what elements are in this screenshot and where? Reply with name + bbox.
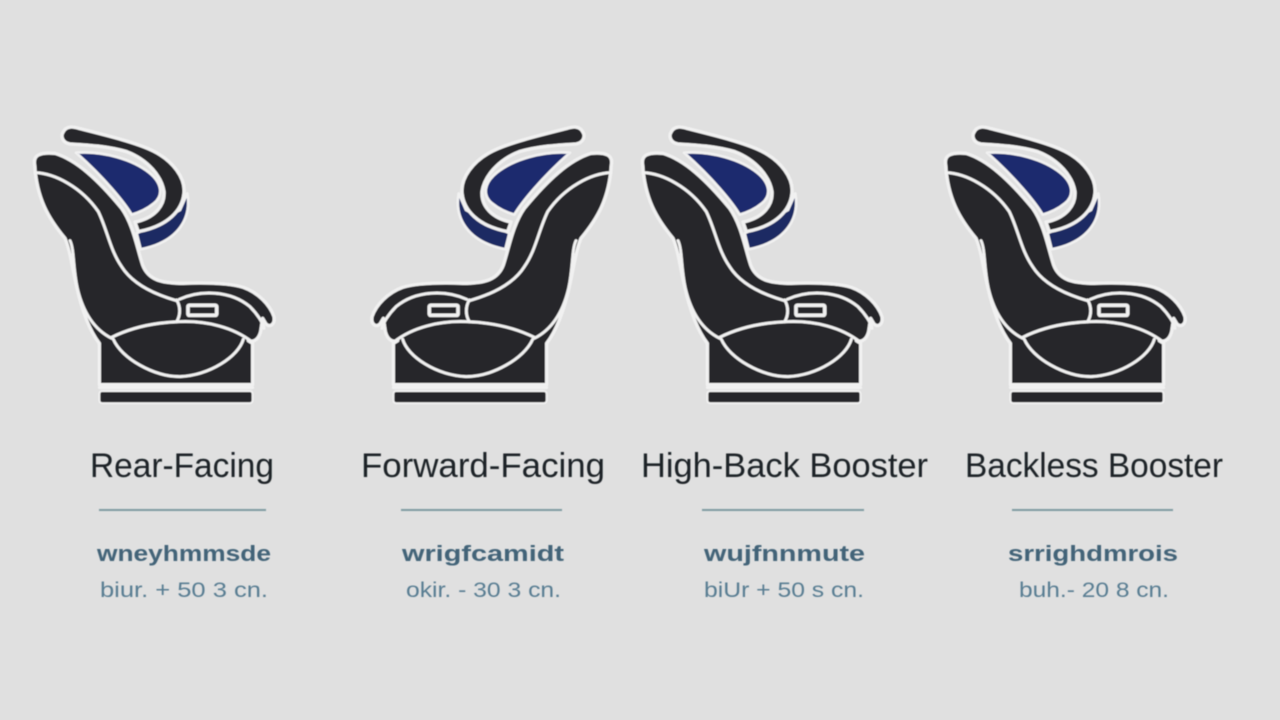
panel: high-back booster xyxy=(641,127,928,602)
range text: rear-facing: biur. + 50 3 cn. xyxy=(100,579,268,602)
weight label: forward-facing: wrigfcamidt xyxy=(401,541,565,566)
weight label: high-back booster: wujfnnmute xyxy=(703,541,865,566)
infographic content xyxy=(34,127,1223,602)
panel: backless booster xyxy=(945,127,1223,602)
divider: high-back booster xyxy=(702,509,864,511)
weight label: rear-facing: wneyhmmsde xyxy=(96,541,271,566)
icon: rear-facing car seat xyxy=(34,127,274,403)
divider: backless booster xyxy=(1012,509,1173,511)
panel: forward-facing xyxy=(361,127,612,602)
icon: backless booster seat xyxy=(945,127,1185,403)
icon: forward-facing car seat xyxy=(372,127,612,403)
range text: high-back booster: biUr + 50 s cn. xyxy=(704,579,864,602)
weight label: backless booster: srrighdmrois xyxy=(1008,541,1178,566)
heading: rear-facing: Rear-Facing xyxy=(90,447,274,485)
range text: forward-facing: okir. - 30 3 cn. xyxy=(406,579,561,602)
divider: rear-facing xyxy=(99,509,266,511)
icon: high-back booster seat xyxy=(642,127,882,403)
heading: forward-facing: Forward-Facing xyxy=(361,447,605,485)
heading: backless booster: Backless Booster xyxy=(965,447,1223,485)
divider: forward-facing xyxy=(401,509,562,511)
range text: backless booster: buh.- 20 8 cn. xyxy=(1019,579,1169,602)
panel: rear-facing xyxy=(34,127,274,602)
heading: high-back booster: High-Back Booster xyxy=(641,447,928,485)
